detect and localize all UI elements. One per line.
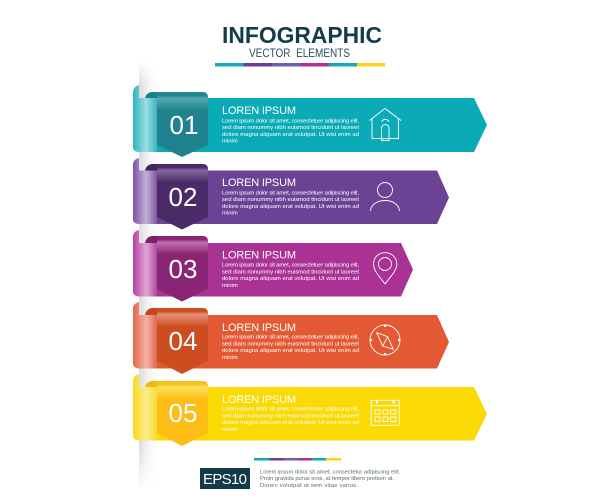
ribbon bar 04 xyxy=(150,315,449,368)
title: INFOGRAPHIC xyxy=(222,22,382,48)
icon: map pin xyxy=(374,253,397,284)
footer colour bar xyxy=(254,458,341,460)
icon: compass xyxy=(370,325,400,355)
text 01: minim xyxy=(222,138,238,144)
ribbon bar 02 xyxy=(150,170,449,224)
number 05: 05 xyxy=(169,398,197,428)
icon: house xyxy=(370,108,401,140)
text 03 xyxy=(222,262,359,289)
heading 03: LOREN IPSUM xyxy=(222,250,296,262)
footer text: Donec volutpat ut sem vitae varius. xyxy=(260,483,358,489)
text 03: Lorem ipsum dolor sit amet, consectetuer adipiscing elit, xyxy=(222,262,359,268)
text 05: dolore magna aliquam erat volutpat. Ut wisi enim ad xyxy=(222,420,359,426)
text 01: dolore magna aliquam erat volutpat. Ut wisi enim ad xyxy=(222,132,359,138)
heading 02: LOREN IPSUM xyxy=(222,177,296,189)
ribbon bar 05 xyxy=(150,387,487,440)
text 01: Lorem ipsum dolor sit amet, consectetuer adipiscing elit, xyxy=(222,118,359,124)
fold 01 xyxy=(133,85,157,152)
curl 02 xyxy=(145,164,157,170)
panel: step 01 xyxy=(133,85,487,157)
number 02: 02 xyxy=(169,182,197,212)
icon: person xyxy=(370,182,400,211)
heading 04: LOREN IPSUM xyxy=(222,322,296,334)
text 04: Lorem ipsum dolor sit amet, consectetuer adipiscing elit, xyxy=(222,335,359,341)
fold 03 xyxy=(133,230,157,296)
heading 05: LOREN IPSUM xyxy=(222,394,296,406)
text 03: sed diam nonummy nibh euismod tincidunt ut laoreet xyxy=(222,269,359,275)
curl 01 xyxy=(145,92,157,98)
text 01 xyxy=(222,118,359,144)
tab 01 xyxy=(157,92,208,157)
heading 01: LOREN IPSUM xyxy=(222,105,296,117)
fold 02 xyxy=(133,158,157,224)
text 02: sed diam nonummy nibh euismod tincidunt ut laoreet xyxy=(222,197,359,203)
text 04 xyxy=(222,335,359,361)
footer text: Proin gravida purus eros, at tempor libero pretium at. xyxy=(260,476,394,482)
curl 05 xyxy=(145,381,157,387)
curl 04 xyxy=(145,308,157,315)
ribbon bar 03 xyxy=(150,243,413,296)
text 04: sed diam nonummy nibh euismod tincidunt ut laoreet xyxy=(222,342,359,348)
text 03: dolore magna aliquam erat volutpat. Ut wisi enim ad xyxy=(222,276,359,282)
tab 02 xyxy=(157,164,208,230)
text 05: minim xyxy=(222,427,238,433)
text 01: sed diam nonummy nibh euismod tincidunt ut laoreet xyxy=(222,125,359,131)
text 05 xyxy=(222,407,359,433)
text 02: minim xyxy=(222,210,238,216)
tab 04 xyxy=(157,308,208,374)
number 03: 03 xyxy=(169,254,197,284)
footer text xyxy=(260,470,400,489)
pole behind ribbons xyxy=(139,62,158,491)
text 03: minim xyxy=(222,283,238,289)
fold 04 xyxy=(133,302,157,368)
EPS10 badge: EPS10 xyxy=(203,471,247,488)
text 02: Lorem ipsum dolor sit amet, consectetuer adipiscing elit, xyxy=(222,190,359,196)
panel: step 04 xyxy=(133,302,449,374)
curl 03 xyxy=(145,236,157,243)
text 02: dolore magna aliquam erat volutpat. Ut wisi enim ad xyxy=(222,204,359,210)
panel: step 05 xyxy=(133,374,487,446)
text 04: minim xyxy=(222,355,238,361)
tab 03 xyxy=(157,236,208,302)
footer text: Lorem ipsum dolor sit amet, consectetur adipiscing elit. xyxy=(260,470,400,476)
icon: calendar xyxy=(371,400,399,425)
title colour bar xyxy=(215,63,385,66)
panel: step 03 xyxy=(133,230,413,302)
text 04: dolore magna aliquam erat volutpat. Ut wisi enim ad xyxy=(222,348,359,354)
number 04: 04 xyxy=(169,326,197,356)
fold 05 xyxy=(133,374,157,440)
text 05: sed diam nonummy nibh euismod tincidunt ut laoreet xyxy=(222,414,359,420)
number 01: 01 xyxy=(170,110,198,140)
text 02 xyxy=(222,190,359,216)
text 05: Lorem ipsum dolor sit amet, consectetuer adipiscing elit, xyxy=(222,407,359,413)
panel: step 02 xyxy=(133,158,449,230)
subtitle: VECTOR ELEMENTS xyxy=(249,48,350,60)
tab 05 xyxy=(157,381,208,446)
ribbon bar 01 xyxy=(150,98,487,152)
